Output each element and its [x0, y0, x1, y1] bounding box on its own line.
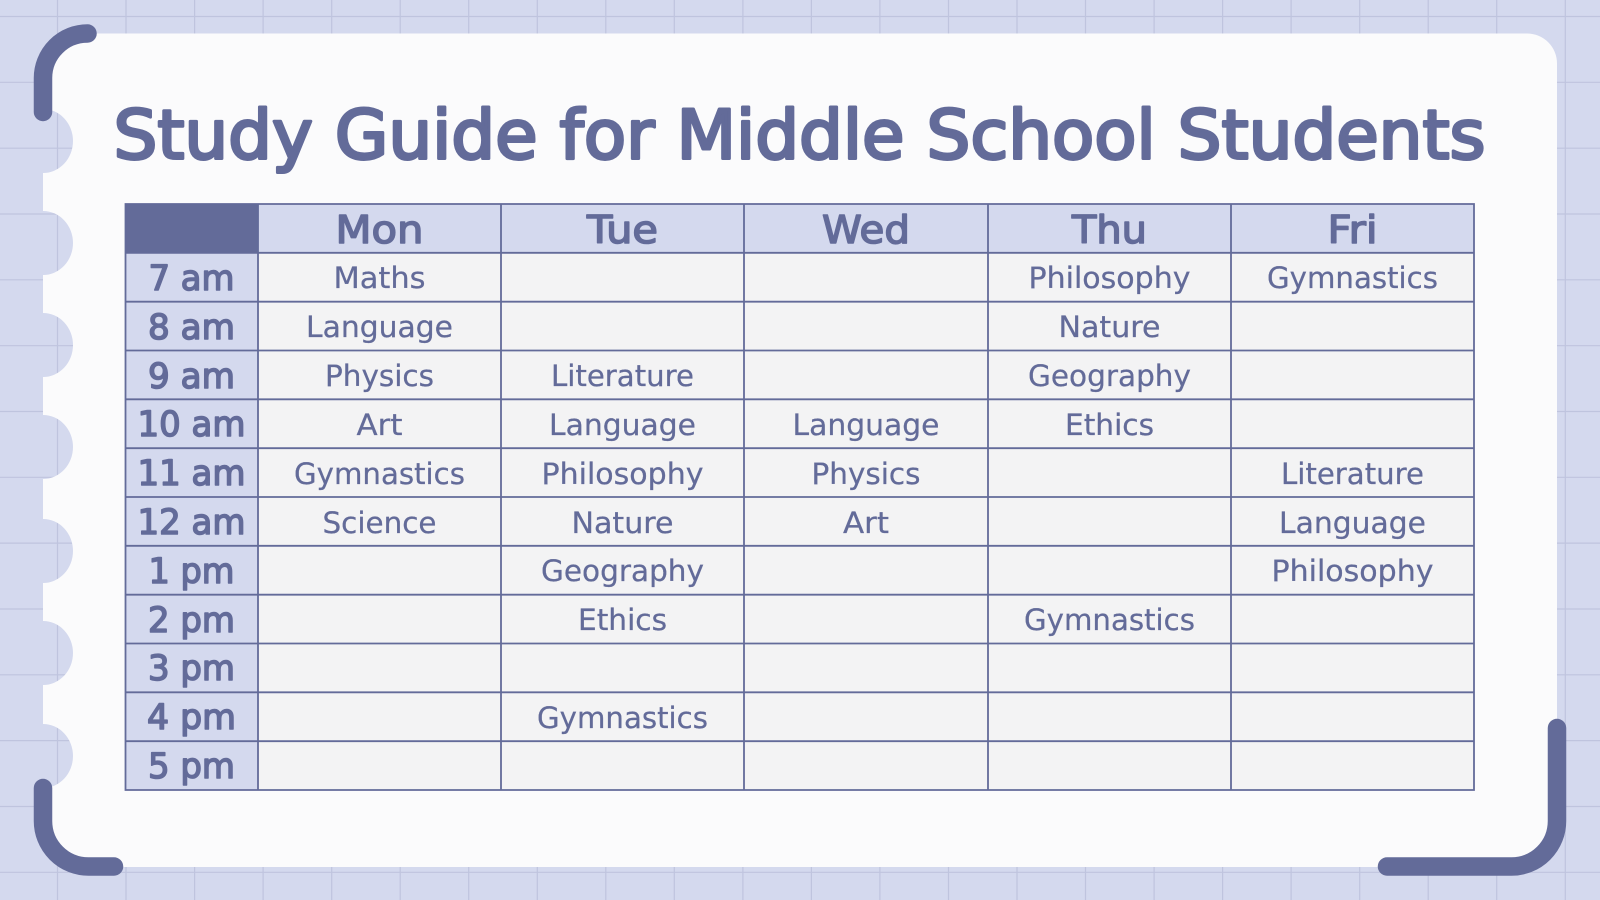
row: 12 am [138, 503, 1426, 543]
row: 8 am: Nature [1058, 310, 1160, 344]
row: 10 am: Ethics [1065, 408, 1154, 442]
row: 11 am: Literature [1281, 457, 1424, 491]
row: 10 am: Language [549, 408, 696, 442]
row: 2 pm [148, 601, 1195, 641]
row: 1 pm: 1 pm [148, 552, 234, 592]
row: 12 am: Art [843, 506, 889, 540]
row: 8 am: Language [306, 310, 453, 344]
row: 9 am: Physics [325, 359, 434, 393]
row: 7 am [148, 259, 1438, 299]
row: 2 pm: Gymnastics [1024, 603, 1195, 637]
row: 9 am: Literature [551, 359, 694, 393]
row: 11 am: Gymnastics [294, 457, 465, 491]
row: 4 pm [147, 698, 708, 738]
row: 7 am: Gymnastics [1267, 261, 1438, 295]
row: 9 am: Geography [1028, 359, 1191, 393]
header row: days: Fri [1328, 208, 1378, 252]
icon: top-left corner bracket [43, 34, 88, 112]
row: 3 pm: 3 pm [148, 649, 235, 689]
title: Study Guide for Middle School Students [114, 96, 1486, 176]
row: 1 pm: Philosophy [1272, 554, 1434, 588]
row: 10 am [138, 405, 1154, 445]
row: 7 am: Maths [334, 261, 426, 295]
header row: days: Thu [1071, 208, 1147, 252]
row: 9 am [148, 357, 1191, 397]
icon: bottom-left corner bracket [43, 788, 114, 866]
row: 1 pm: Geography [541, 554, 704, 588]
row: 12 am: Nature [572, 506, 674, 540]
timetable [126, 204, 1474, 790]
row: 4 pm: Gymnastics [537, 701, 708, 735]
header row: days: Tue [586, 208, 658, 252]
row: 7 am: 7 am [148, 259, 234, 299]
row: 11 am: 11 am [138, 454, 246, 494]
row: 10 am: 10 am [138, 405, 246, 445]
row: 4 pm: 4 pm [147, 698, 236, 738]
row: 1 pm [148, 552, 1434, 592]
header row: days [336, 208, 1378, 252]
row: 12 am: Science [322, 506, 436, 540]
row: 12 am: Language [1279, 506, 1426, 540]
header row: days: Mon [336, 208, 424, 252]
table backgrounds [126, 204, 1474, 790]
row: 11 am [138, 454, 1424, 494]
row: 10 am: Language [792, 408, 940, 442]
row: 9 am: 9 am [148, 357, 235, 397]
row: 10 am: Art [356, 408, 402, 442]
row: 2 pm: Ethics [578, 603, 667, 637]
row: 2 pm: 2 pm [148, 601, 235, 641]
row: 11 am: Philosophy [542, 457, 704, 491]
row: 7 am: Philosophy [1028, 261, 1190, 295]
row: 11 am: Physics [812, 457, 920, 491]
row: 5 pm: 5 pm [148, 747, 235, 787]
row: 8 am [148, 308, 1160, 348]
row: 12 am: 12 am [138, 503, 246, 543]
icon: bottom-right corner bracket [1387, 728, 1557, 866]
row: 8 am: 8 am [148, 308, 235, 348]
header row: days: Wed [822, 208, 910, 252]
